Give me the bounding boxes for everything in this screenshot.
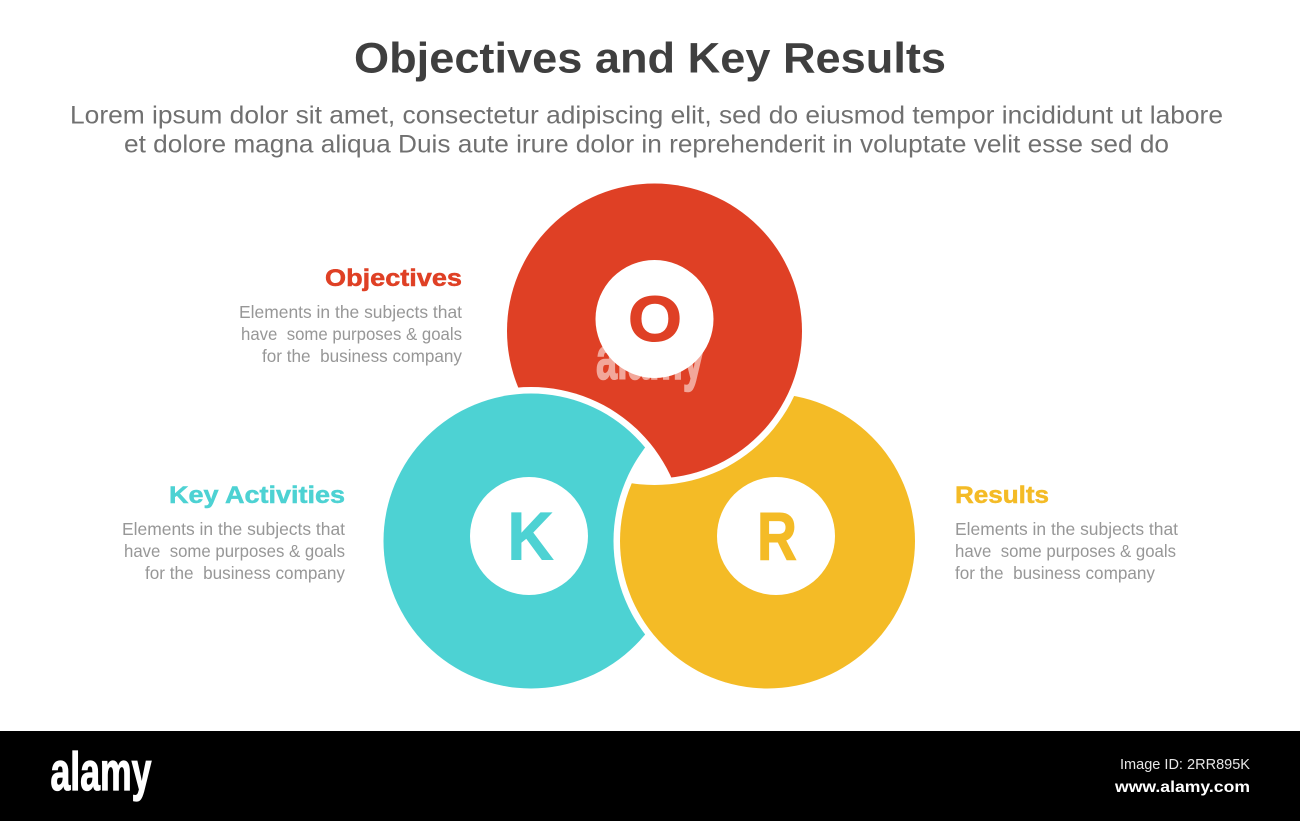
circle: objectives [507, 184, 802, 478]
label: objectives: for the business company [262, 346, 462, 366]
label: objectives: Elements in the subjects that [239, 302, 462, 322]
label: results: have some purposes & goals [955, 541, 1176, 561]
badge: R [717, 477, 835, 595]
label: key activities: Elements in the subjects that [122, 519, 345, 539]
label: objectives: Objectives [325, 265, 462, 292]
label: key activities [122, 482, 345, 583]
intro text: Lorem ipsum dolor sit amet, consectetur adipiscing elit, sed do eiusmod tempor incididunt ut labore [70, 102, 1223, 130]
label: results: Elements in the subjects that [955, 519, 1178, 539]
image id: Image ID: 2RR895K [1120, 756, 1250, 773]
circle: key activities [384, 394, 645, 688]
footer logo: alamy [50, 742, 152, 802]
watermark: alamy [596, 325, 704, 392]
footer bar [0, 731, 1300, 821]
label: key activities: Key Activities [169, 482, 345, 509]
badge: K: K [508, 498, 554, 574]
badge: K [470, 477, 588, 595]
label: key activities: have some purposes & goals [124, 541, 345, 561]
label: objectives: have some purposes & goals [241, 324, 462, 344]
label: results: for the business company [955, 563, 1155, 583]
label: results: Results [955, 482, 1049, 509]
circle: results [620, 394, 915, 688]
intro text: et dolore magna aliqua Duis aute irure dolor in reprehenderit in voluptate velit esse sed do [124, 130, 1169, 158]
label: results [955, 482, 1178, 583]
title: Objectives and Key Results [354, 34, 946, 82]
badge: O [596, 260, 714, 378]
label: objectives [239, 265, 462, 366]
intro text [70, 102, 1223, 158]
badge: R: R [757, 498, 797, 574]
label: key activities: for the business company [145, 563, 345, 583]
website: www.alamy.com [1114, 779, 1250, 796]
badge: O: O [628, 283, 682, 355]
